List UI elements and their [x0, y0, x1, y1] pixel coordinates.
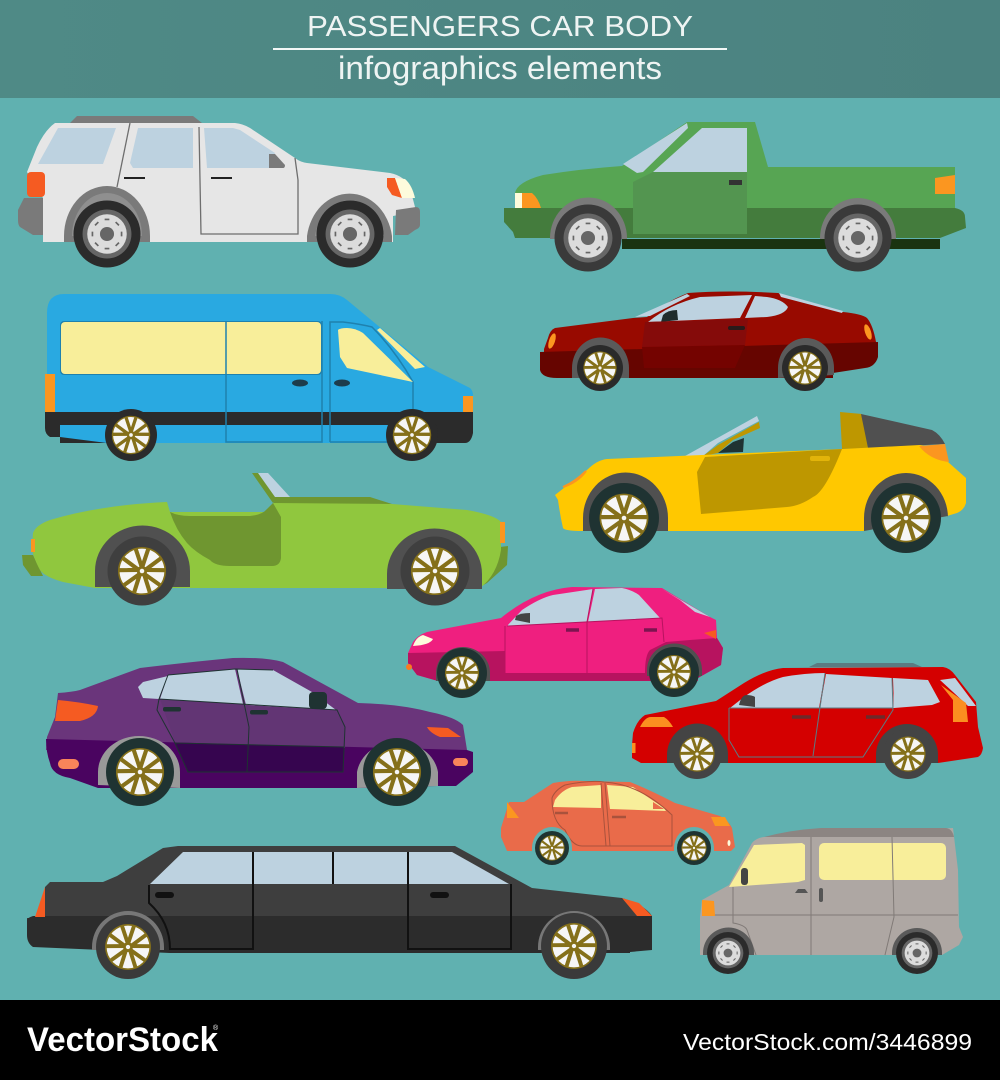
roadster cockpit — [170, 503, 281, 566]
compact windows — [553, 785, 666, 811]
footer watermark bar: ® — [213, 1024, 219, 1032]
coupe door — [642, 319, 748, 347]
compact wheels — [535, 831, 711, 865]
car: black limousine — [27, 846, 652, 979]
wagon windows — [730, 673, 940, 708]
car: lime roadster — [22, 473, 508, 606]
minibus side windows — [61, 322, 321, 374]
SUV body — [27, 123, 415, 242]
pickup wheels — [554, 204, 892, 272]
SUV wheels — [74, 200, 384, 268]
car: grey minivan — [700, 828, 963, 974]
title: PASSENGERS CAR BODY — [307, 11, 693, 43]
car: maroon coupe — [540, 292, 878, 391]
convertible wheels — [589, 483, 941, 553]
car: green pickup — [504, 122, 966, 272]
header band — [0, 0, 1000, 98]
sedan windows — [138, 669, 336, 710]
image URL: VectorStock.com/3446899 — [683, 1029, 972, 1055]
car: purple sedan — [46, 658, 473, 806]
brand name: VectorStock — [27, 1021, 218, 1059]
minivan wheels — [707, 932, 938, 974]
coupe wheels — [577, 345, 828, 391]
footer watermark bar — [0, 1000, 1000, 1080]
roadster body — [32, 502, 501, 588]
car: white SUV — [18, 116, 420, 268]
limousine wheels — [96, 913, 607, 979]
minibus wheels — [105, 409, 438, 461]
car: yellow convertible — [555, 412, 966, 553]
minivan windows — [729, 843, 805, 887]
pink wheels — [437, 647, 699, 698]
sedan wheels — [106, 738, 431, 806]
roadster wheels — [108, 536, 470, 606]
limousine windows — [150, 852, 509, 884]
sedan doors — [160, 699, 345, 748]
car: blue minibus — [45, 294, 473, 461]
convertible body — [555, 445, 966, 531]
car: orange compact — [501, 781, 735, 865]
convertible door — [697, 449, 842, 514]
car: pink hatchback — [406, 587, 723, 698]
pickup door — [633, 172, 747, 234]
pink windows — [507, 588, 660, 626]
car: red wagon — [632, 663, 983, 779]
wagon wheels — [672, 729, 933, 779]
subtitle: infographics elements — [338, 50, 662, 86]
